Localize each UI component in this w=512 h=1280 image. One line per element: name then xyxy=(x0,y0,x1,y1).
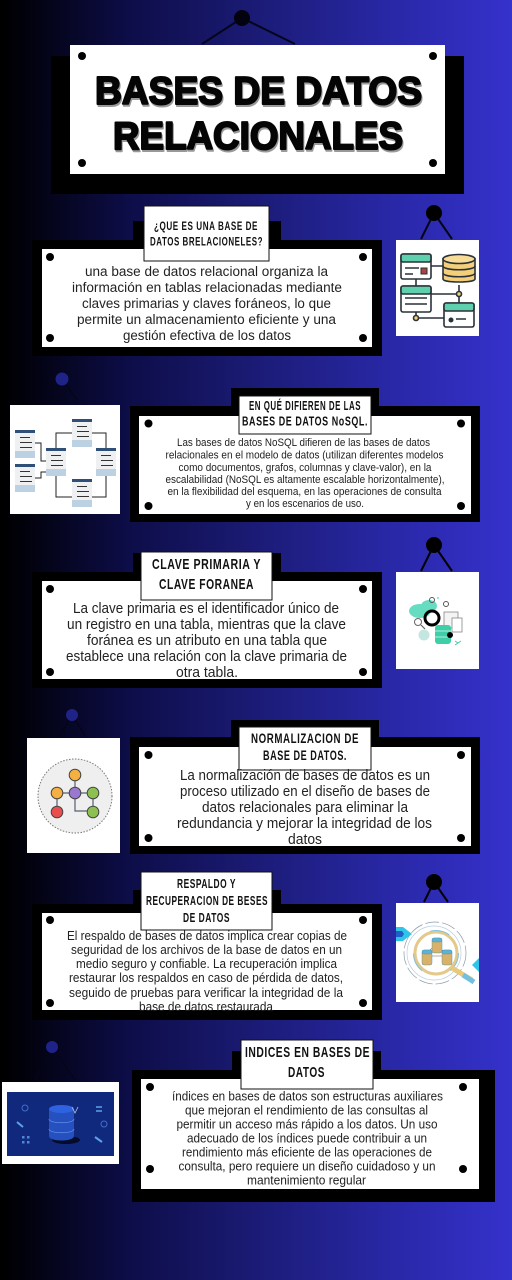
text block: un registro en una tabla, mientras que la clave xyxy=(67,617,346,633)
text block xyxy=(177,768,432,848)
text block: información en tablas relacionadas mediante xyxy=(72,280,342,295)
text block xyxy=(67,929,347,1014)
heading label: EN QUÉ DIFIEREN DE LAS xyxy=(249,398,361,413)
text block: adecuado de los índices puede contribuir a un xyxy=(187,1132,427,1146)
text block xyxy=(72,264,342,343)
text block: seguido de pruebas para verificar la integridad de la xyxy=(69,986,343,1000)
text block: una base de datos relacional organiza la xyxy=(85,264,328,279)
heading label xyxy=(141,552,272,600)
text block: relacionales en el modelo de datos (utilizan diferentes modelos xyxy=(166,450,444,462)
text block: rendimiento más eficiente de las operaciones de xyxy=(182,1146,432,1160)
text block: redundancia y mejorar la integridad de los xyxy=(177,816,432,832)
icon: relational tables diagram xyxy=(10,372,120,514)
text block: y en los escenarios de uso. xyxy=(246,498,364,510)
heading label xyxy=(239,396,371,434)
title xyxy=(95,70,423,160)
icon: normalization nodes xyxy=(27,709,120,853)
icon: servers and database xyxy=(396,205,479,336)
text block: Las bases de datos NoSQL difieren de las bases de datos xyxy=(177,437,430,449)
text block: medio seguro y confiable. La recuperación implica xyxy=(76,957,337,971)
text block: datos xyxy=(288,832,322,848)
panel: title xyxy=(51,10,464,194)
heading label xyxy=(141,872,272,930)
text block: escalabilidad (NoSQL es altamente escalable horizontalmente), xyxy=(166,474,444,486)
text block: permite un almacenamiento eficiente y una xyxy=(77,312,336,327)
text block xyxy=(166,437,444,510)
text block: que mejoran el rendimiento de las consultas al xyxy=(185,1104,428,1118)
heading label xyxy=(144,206,269,261)
text block: seguridad de los archivos de la base de datos en un xyxy=(71,943,342,957)
title: RELACIONALES xyxy=(114,117,404,160)
heading label: BASE DE DATOS. xyxy=(263,748,347,763)
text block: restaurar los respaldos en caso de pérdida de datos, xyxy=(69,971,343,985)
icon: cloud data illustration xyxy=(396,537,479,669)
heading label xyxy=(239,727,371,770)
heading label: BASES DE DATOS NoSQL. xyxy=(242,414,368,428)
panel: indices en bases de datos xyxy=(132,1040,495,1202)
text block: mantenimiento regular xyxy=(247,1174,366,1188)
panel: que es una base de datos relacional xyxy=(32,206,382,356)
text block: proceso utilizado en el diseño de bases de xyxy=(180,784,430,800)
text block: índices en bases de datos son estructuras auxiliares xyxy=(172,1090,443,1104)
text block: El respaldo de bases de datos implica crear copias de xyxy=(67,929,347,943)
icon: database on navy background xyxy=(2,1041,119,1164)
heading label: ¿QUE ES UNA BASE DE xyxy=(154,221,258,233)
heading label: DATOS xyxy=(288,1064,325,1081)
title: RELACIONALES xyxy=(113,115,403,158)
heading label: DE DATOS xyxy=(183,910,230,925)
text block: en la flexibilidad del esquema, en las operaciones de consulta xyxy=(168,486,442,498)
text block: otra tabla. xyxy=(176,665,238,681)
text block: consulta, pero requiere un diseño cuidadoso y un xyxy=(178,1160,436,1174)
heading label: RECUPERACION DE BESES xyxy=(146,893,268,908)
text block: datos relacionales para eliminar la xyxy=(202,800,409,816)
text block: La clave primaria es el identificador único de xyxy=(73,601,339,617)
text block xyxy=(66,601,347,681)
panel: clave primaria y clave foranea xyxy=(32,552,382,688)
text block: gestión efectiva de los datos xyxy=(123,328,291,343)
text block: permitir un acceso más rápido a los datos. Un uso xyxy=(176,1118,438,1132)
icon: database magnifier xyxy=(396,874,479,1002)
heading label: DATOS BRELACIONELES? xyxy=(150,236,263,248)
text block: base de datos restaurada xyxy=(139,1000,273,1014)
text block: establece una relación con la clave primaria de xyxy=(66,649,347,665)
heading label: CLAVE FORANEA xyxy=(159,576,254,593)
text block: como documentos, grafos, columnas y clave-valor), en la xyxy=(178,462,432,474)
heading label: CLAVE PRIMARIA Y xyxy=(152,556,261,573)
heading label: RESPALDO Y xyxy=(177,876,236,891)
panel: normalizacion de base de datos xyxy=(130,720,480,854)
heading label: INDICES EN BASES DE xyxy=(245,1044,370,1061)
heading label xyxy=(241,1040,373,1089)
title: BASES DE DATOS xyxy=(96,72,423,115)
heading label: NORMALIZACION DE xyxy=(251,731,359,746)
text block: claves primarias y claves foráneos, lo que xyxy=(82,296,331,311)
panel: respaldo y recuperacion xyxy=(32,872,382,1020)
title: BASES DE DATOS xyxy=(95,70,422,113)
text block: foránea es un atributo en una tabla que xyxy=(87,633,327,649)
text block: La normalización de bases de datos es un xyxy=(180,768,430,784)
text block xyxy=(172,1090,443,1188)
panel: en que difieren de las bases NoSQL xyxy=(130,388,480,522)
